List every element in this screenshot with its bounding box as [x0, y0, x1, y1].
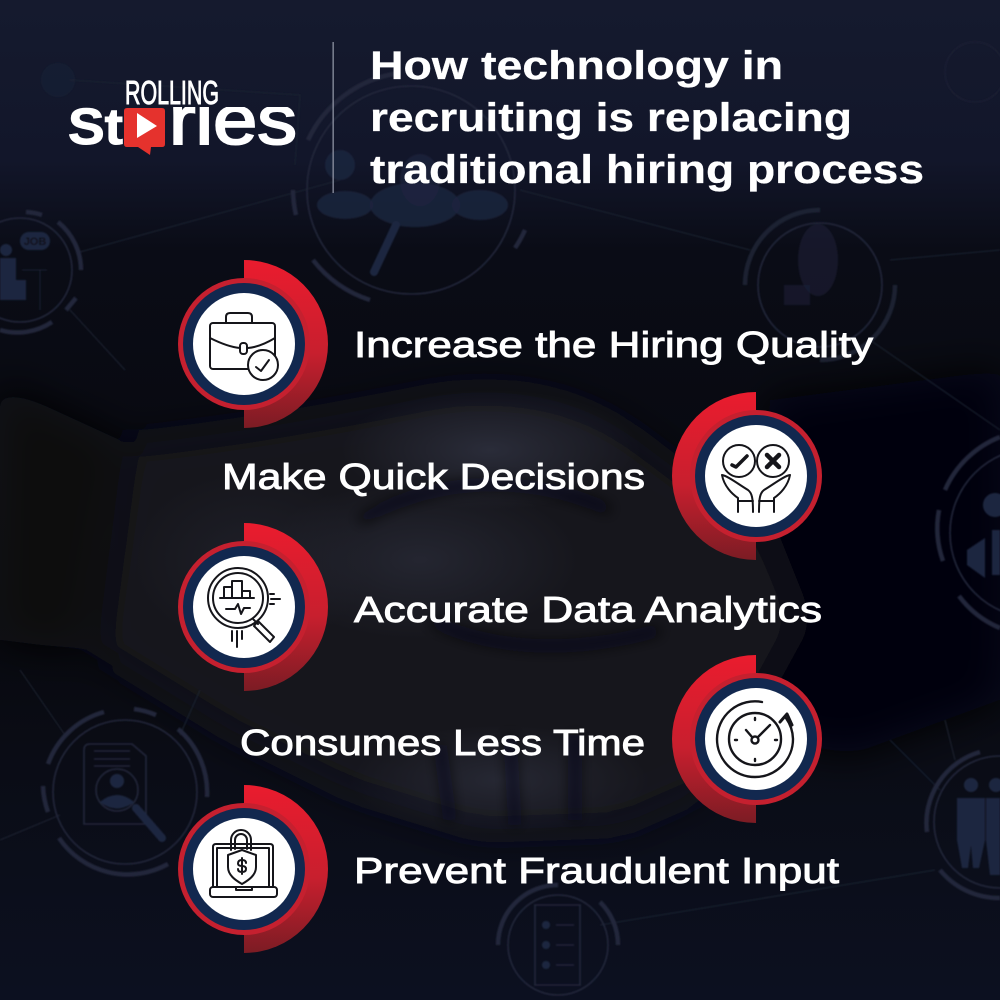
title: recruiting is replacing	[370, 96, 852, 140]
handshake photo	[0, 370, 1000, 835]
logo	[69, 80, 296, 155]
circle: people right	[926, 752, 1000, 898]
title	[370, 44, 924, 192]
label: Accurate Data Analytics	[354, 589, 822, 630]
label: Prevent Fraudulent Input	[354, 850, 839, 891]
item: prevent fraudulent input	[178, 785, 839, 953]
icon: data magnifier	[208, 568, 280, 647]
item: increase the hiring quality	[178, 260, 873, 428]
logo word: stories end: ries	[169, 81, 297, 159]
label: Consumes Less Time	[240, 722, 645, 763]
icon: decisions	[722, 445, 790, 512]
item: make quick decisions	[222, 392, 822, 560]
badge: briefcase	[178, 260, 328, 428]
title: traditional hiring process	[370, 148, 924, 192]
circle: resume search	[43, 709, 207, 874]
badge: laptop lock	[178, 785, 328, 953]
logo word: stories start: St	[68, 98, 123, 155]
badge: magnifier	[178, 523, 328, 691]
circle: candidate	[745, 210, 895, 360]
circle: job seeker: JOB	[24, 236, 46, 248]
logo icon: play bubble	[124, 108, 165, 155]
title: How technology in	[370, 44, 783, 88]
item: consumes less time	[240, 655, 822, 823]
divider	[332, 42, 334, 193]
circle: team right	[937, 437, 1000, 628]
icon: laptop with shield	[210, 830, 277, 897]
icon: briefcase with check	[210, 313, 278, 380]
badge: hands with choices	[672, 392, 822, 560]
circle: job seeker	[0, 212, 81, 333]
badge: clock	[672, 655, 822, 823]
circle: checklist	[498, 885, 618, 995]
item: accurate data analytics	[178, 523, 822, 691]
circle: hiring team	[293, 73, 525, 300]
circle: top corners	[41, 42, 1000, 102]
label: Make Quick Decisions	[222, 456, 645, 497]
label: Increase the Hiring Quality	[354, 324, 873, 365]
logo word: rolling: ROLLING	[125, 74, 219, 111]
icon: clock with arrow	[717, 701, 793, 777]
